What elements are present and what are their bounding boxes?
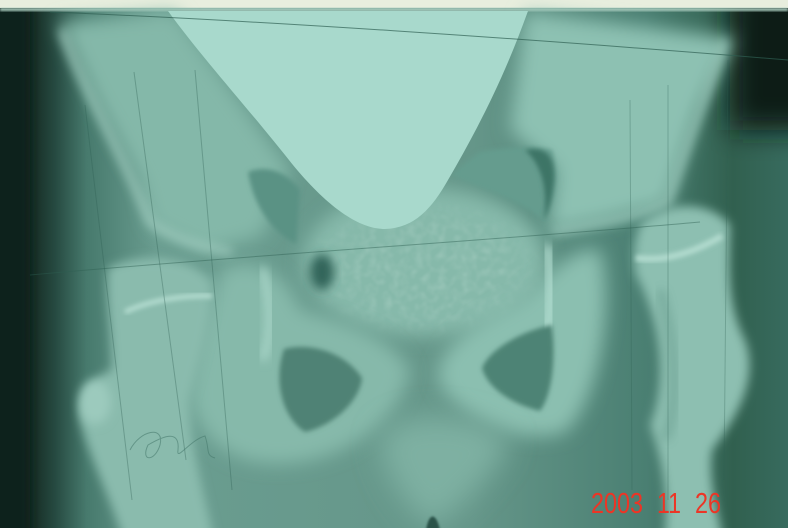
date stamp: 26 xyxy=(695,488,721,520)
sacrum xyxy=(300,188,550,340)
right femur xyxy=(634,206,750,528)
pubic and ischial bones xyxy=(190,245,606,464)
obturator foramina xyxy=(279,325,554,432)
handwritten signature xyxy=(130,432,215,458)
date stamp: 2003 xyxy=(591,488,643,520)
right iliac wing xyxy=(510,12,735,232)
left iliac wing xyxy=(58,12,290,252)
lower midline soft tissue xyxy=(380,418,510,528)
central lead shield xyxy=(168,11,528,229)
sciatic notches xyxy=(248,147,555,290)
date stamp: 11 xyxy=(657,488,681,520)
left femur xyxy=(79,258,215,528)
date stamp xyxy=(591,488,721,520)
